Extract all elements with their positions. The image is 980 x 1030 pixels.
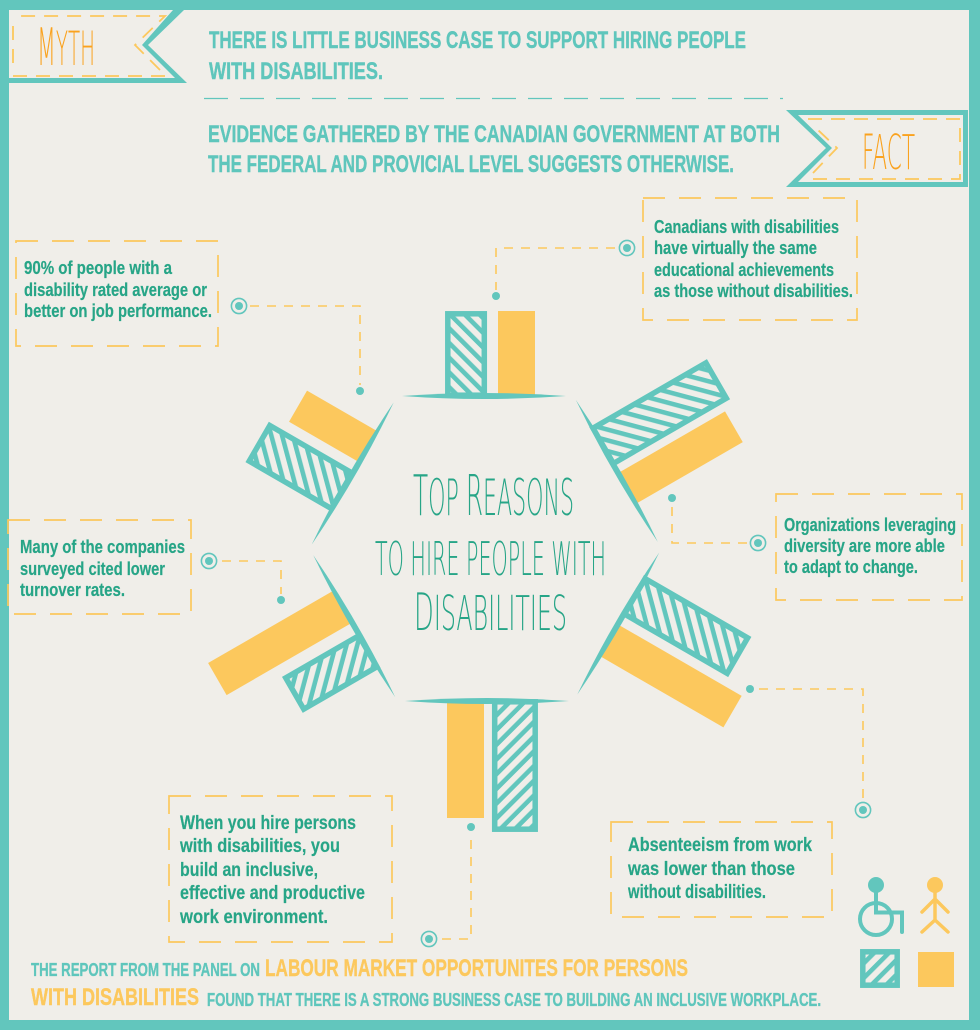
callout: job performance: disability rated average or bbox=[24, 280, 207, 300]
myth statement: THERE IS LITTLE BUSINESS CASE TO SUPPORT HIRING PEOPLE bbox=[209, 27, 746, 54]
icon: person bbox=[922, 877, 948, 932]
upper right bar pair bbox=[573, 334, 771, 543]
callout: absenteeism bbox=[611, 822, 832, 917]
callout: education: have virtually the same bbox=[654, 238, 817, 258]
connector: diversity bbox=[668, 494, 766, 551]
connector: inclusive environment bbox=[421, 823, 475, 947]
callout: absenteeism: was lower than those bbox=[627, 858, 795, 880]
callout: education: Canadians with disabilities bbox=[654, 217, 839, 237]
footer statement: WITH DISABILITIES bbox=[31, 984, 199, 1011]
callout: absenteeism: Absenteeism from work bbox=[628, 834, 812, 856]
central title bbox=[375, 464, 606, 643]
central title: TOP REASONS bbox=[413, 464, 574, 529]
callout: inclusive environment bbox=[169, 796, 392, 942]
callout: job performance: better on job performance. bbox=[24, 301, 212, 321]
upper left bar pair bbox=[229, 355, 396, 546]
footer statement bbox=[31, 955, 821, 1011]
fact banner bbox=[786, 110, 968, 187]
bottom bar pair bbox=[405, 698, 569, 829]
callout: education: educational achievements bbox=[654, 260, 834, 280]
fact banner: FACT bbox=[862, 125, 915, 181]
chart: radial bars around hexagon bbox=[188, 311, 783, 829]
connector: job performance bbox=[231, 298, 364, 395]
callout: diversity: to adapt to change. bbox=[784, 557, 918, 577]
callout: inclusive environment: When you hire persons bbox=[180, 812, 356, 834]
callout: job performance bbox=[16, 241, 218, 346]
myth label: MYTH bbox=[37, 18, 95, 78]
footer statement: LABOUR MARKET OPPORTUNITES FOR PERSONS bbox=[265, 955, 688, 982]
fact statement bbox=[208, 121, 780, 178]
callout: diversity: diversity are more able bbox=[784, 536, 945, 556]
callout: education bbox=[643, 198, 857, 320]
callout: inclusive environment: effective and productive bbox=[180, 882, 365, 904]
myth statement: WITH DISABILITIES. bbox=[209, 58, 383, 85]
callout: job performance: 90% of people with a bbox=[24, 258, 173, 278]
callout: diversity bbox=[776, 494, 962, 600]
callout: education: as those without disabilities. bbox=[654, 281, 853, 301]
myth banner bbox=[9, 10, 187, 83]
callout: turnover: surveyed cited lower bbox=[20, 559, 165, 579]
callout: absenteeism: without disabilities. bbox=[627, 881, 766, 903]
callout: turnover: turnover rates. bbox=[20, 580, 125, 600]
callout: inclusive environment: with disabilities, you bbox=[179, 835, 340, 857]
text: TO HIRE PEOPLE WITH bbox=[375, 532, 606, 586]
callout: inclusive environment: build an inclusive, bbox=[180, 859, 318, 881]
central title: DISABILITIES bbox=[414, 583, 567, 643]
swatch: hatched bbox=[863, 952, 897, 985]
fact statement: EVIDENCE GATHERED BY THE CANADIAN GOVERNMENT AT BOTH bbox=[208, 121, 780, 148]
lower right bar pair bbox=[575, 551, 783, 766]
legend bbox=[860, 877, 954, 987]
connector: education bbox=[492, 240, 635, 300]
fact statement: THE FEDERAL AND PROVICIAL LEVEL SUGGESTS OTHERWISE. bbox=[208, 151, 734, 178]
callout: inclusive environment: work environment. bbox=[179, 906, 328, 928]
swatch: orange bbox=[918, 952, 954, 987]
footer statement: THE REPORT FROM THE PANEL ON bbox=[31, 959, 260, 980]
connector: turnover bbox=[201, 553, 285, 604]
top bar pair bbox=[402, 311, 566, 399]
callout: turnover: Many of the companies bbox=[20, 537, 185, 557]
lower left bar pair bbox=[188, 554, 398, 770]
callout: turnover bbox=[8, 520, 191, 614]
icon: wheelchair user bbox=[860, 877, 902, 935]
connector: absenteeism bbox=[746, 685, 871, 818]
myth statement bbox=[209, 27, 746, 85]
